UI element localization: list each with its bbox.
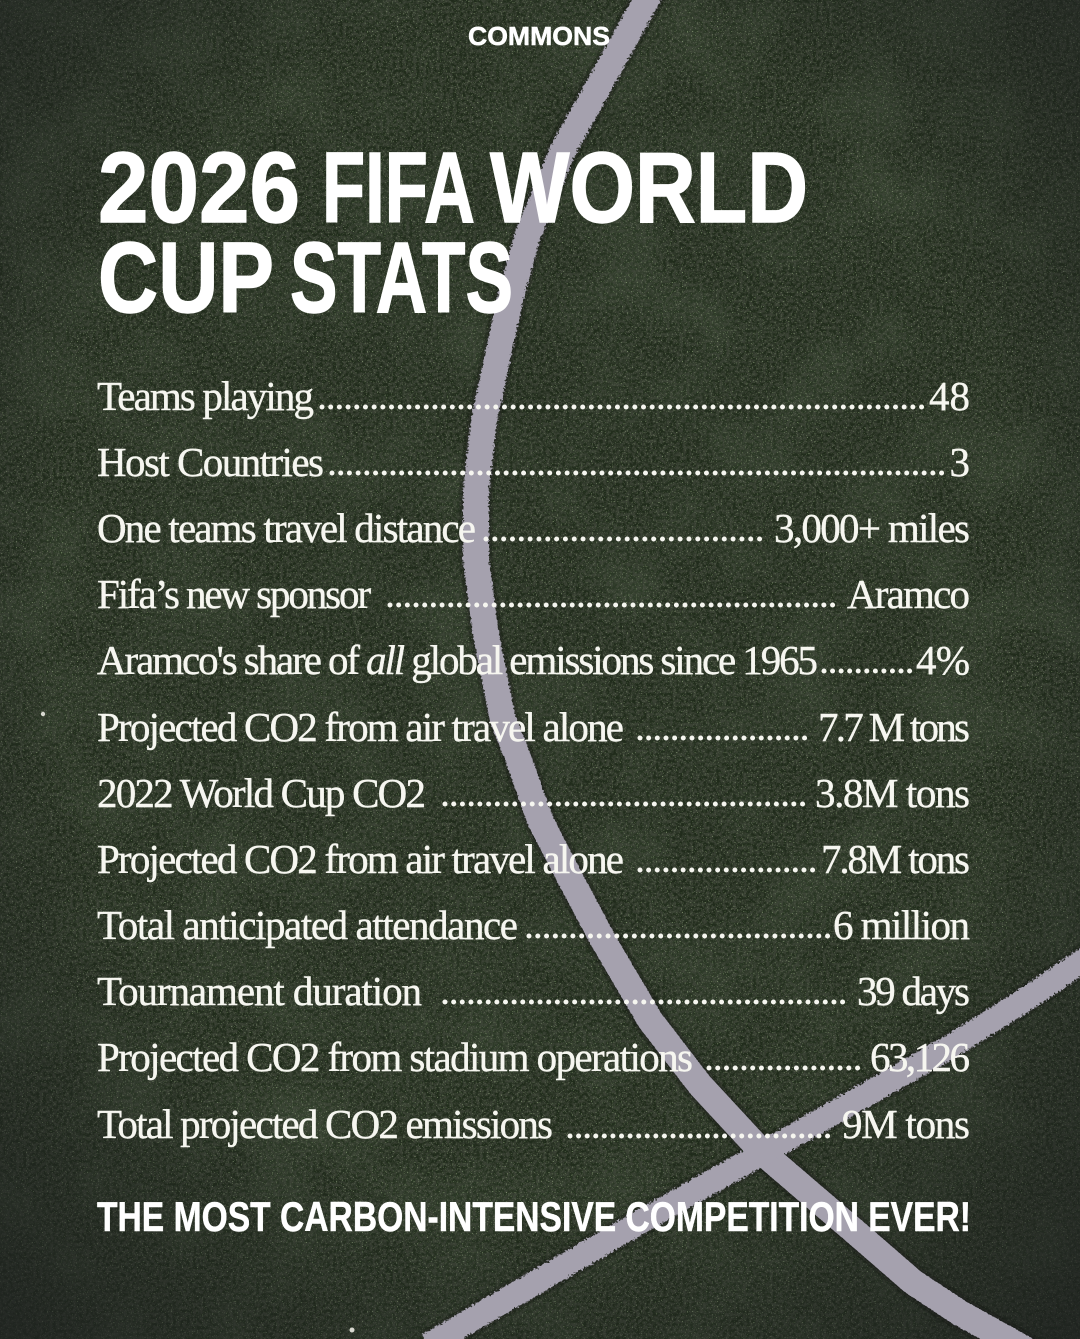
row: attendance: Total anticipated attendance — [97, 902, 518, 948]
row: host countries: Host Countries — [97, 439, 324, 485]
row: stadium operations: Projected CO2 from stadium operations — [97, 1034, 693, 1080]
row: attendance: 6 million — [833, 902, 970, 948]
title: WORLD — [490, 132, 808, 244]
row: total emissions: Total projected CO2 emissions — [97, 1101, 553, 1147]
row: air travel CO2: Projected CO2 from air travel alone — [97, 704, 624, 750]
row: new sponsor — [97, 571, 970, 617]
row: duration: 39 days — [857, 968, 970, 1014]
title: STATS — [290, 222, 513, 334]
brand name: COMMONS — [468, 21, 610, 51]
row: air travel CO2 repeat: 7.8M tons — [821, 836, 970, 882]
pitch markings — [428, 0, 1080, 1339]
row: teams playing: Teams playing — [97, 373, 314, 419]
row: 2022 World Cup CO2 — [97, 770, 970, 816]
straight pitch line — [428, 956, 1080, 1339]
row: travel distance: 3,000+ miles — [774, 505, 970, 551]
row: host countries — [97, 439, 970, 485]
row: air travel CO2 repeat — [97, 836, 970, 882]
row: stadium operations — [97, 1034, 970, 1080]
line shadow — [428, 0, 1080, 1339]
row: host countries: 3 — [950, 439, 970, 485]
title: CUP — [98, 222, 274, 334]
row: attendance — [97, 902, 970, 948]
row: new sponsor: Aramco — [847, 571, 970, 617]
title — [98, 132, 808, 334]
title: 2026 — [98, 132, 300, 244]
row: 2022 World Cup CO2: 3.8M tons — [815, 770, 970, 816]
row: air travel CO2 repeat: Projected CO2 from air travel alone — [97, 836, 624, 882]
row: air travel CO2: 7.7 M tons — [818, 704, 970, 750]
row: teams playing — [97, 373, 970, 419]
row: total emissions — [97, 1101, 970, 1147]
row: 2022 World Cup CO2: 2022 World Cup CO2 — [97, 770, 426, 816]
row: teams playing: 48 — [929, 373, 970, 419]
row: new sponsor: Fifa’s new sponsor — [97, 571, 371, 617]
stats list — [97, 373, 970, 1147]
row: travel distance: One teams travel distance — [97, 505, 476, 551]
row: air travel CO2 — [97, 704, 970, 750]
row: Aramco emissions share: 4% — [916, 637, 970, 683]
title: FIFA — [322, 132, 475, 244]
row: duration: Tournament duration — [97, 968, 422, 1014]
row: Aramco emissions share: Aramco's share of all global emissions since 1965 — [97, 637, 818, 683]
row: total emissions: 9M tons — [842, 1101, 970, 1147]
row: stadium operations: 63,126 — [870, 1034, 970, 1080]
row: duration — [97, 968, 970, 1014]
row: travel distance — [97, 505, 970, 551]
curved pitch line — [476, 0, 1030, 1339]
